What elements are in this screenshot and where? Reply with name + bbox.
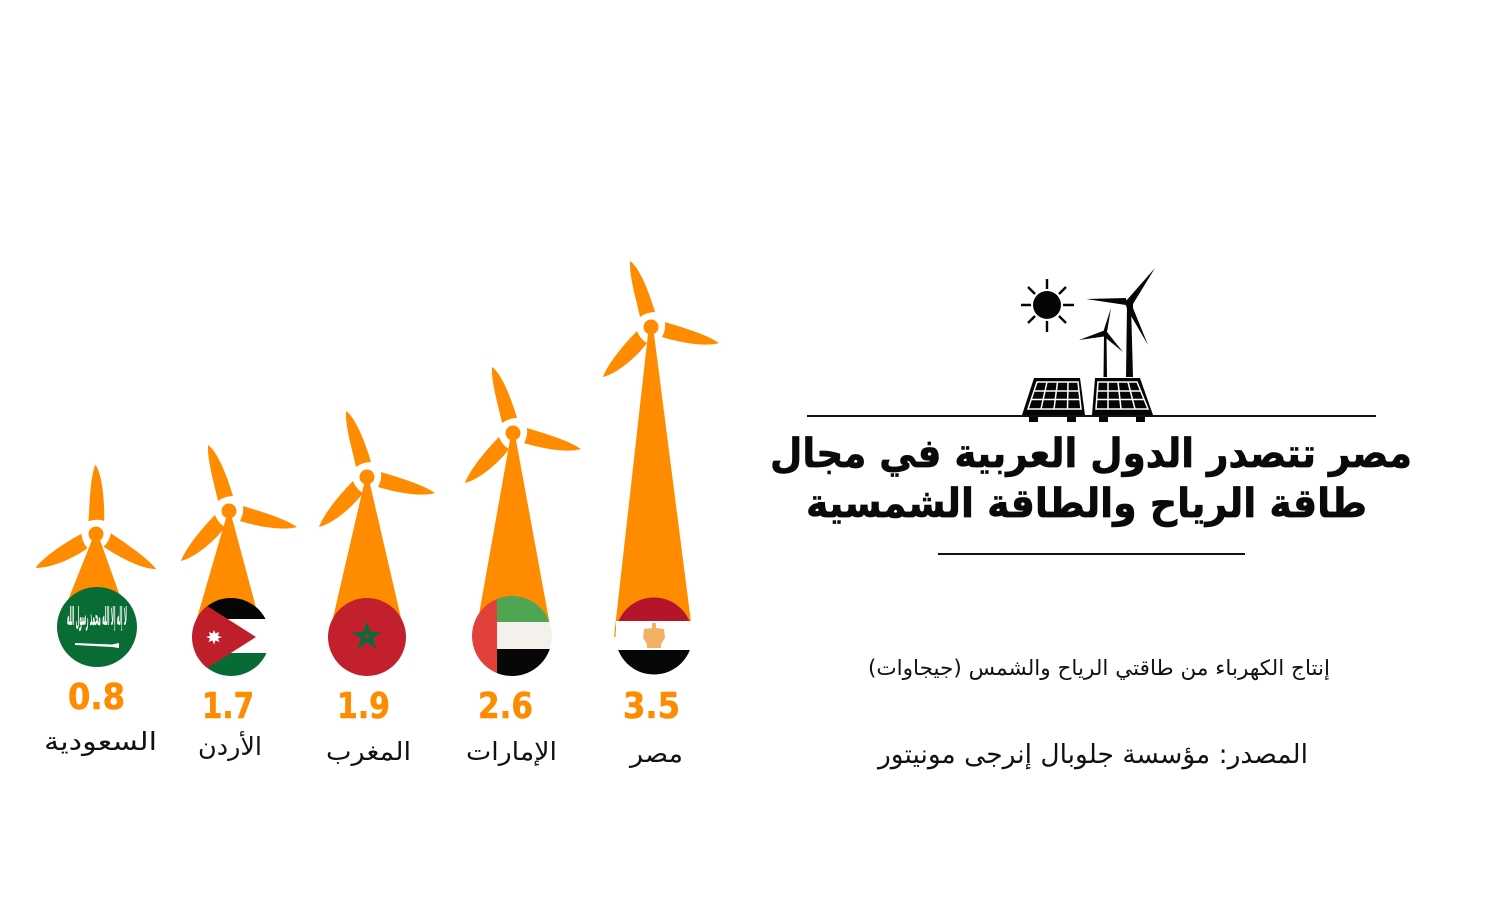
subtitle: chart description: إنتاج الكهرباء من طاقتي الرياح والشمس (جيجاوات) bbox=[868, 656, 1330, 681]
icon: left solar panel bbox=[1022, 378, 1085, 422]
value: Jordan: 1.7 bbox=[202, 686, 254, 727]
flag: UAE bbox=[472, 596, 553, 676]
chart: wind turbines by country bbox=[35, 261, 719, 768]
icon: sun bbox=[1021, 279, 1074, 332]
value: Egypt: 3.5 bbox=[623, 686, 680, 727]
icon: large turbine bbox=[1086, 268, 1155, 377]
flag: Egypt bbox=[614, 596, 694, 676]
icon: small turbine bbox=[1079, 308, 1123, 377]
turbine: UAE bbox=[465, 367, 581, 766]
turbine: Jordan bbox=[181, 445, 297, 761]
icon: right solar panel bbox=[1092, 378, 1153, 422]
icon: sun, wind turbines and solar panels bbox=[1021, 268, 1155, 422]
value: UAE: 2.6 bbox=[478, 686, 533, 727]
label: Morocco: المغرب bbox=[326, 737, 411, 766]
title bbox=[770, 431, 1412, 527]
label: Egypt: مصر bbox=[628, 739, 683, 768]
label: UAE: الإمارات bbox=[466, 737, 557, 766]
flag: Saudi Arabia bbox=[57, 587, 137, 667]
value: Morocco: 1.9 bbox=[337, 686, 390, 727]
label: Jordan: الأردن bbox=[198, 730, 262, 761]
turbine: Morocco bbox=[319, 411, 435, 766]
flag: Morocco bbox=[328, 598, 406, 676]
title: مصر تتصدر الدول العربية في مجال bbox=[770, 431, 1412, 477]
turbine: Egypt bbox=[603, 261, 719, 768]
turbine: Saudi Arabia bbox=[35, 457, 180, 756]
label: Saudi Arabia: السعودية bbox=[44, 727, 157, 756]
title: طاقة الرياح والطاقة الشمسية bbox=[806, 481, 1367, 527]
source note: المصدر: مؤسسة جلوبال إنرجى مونيتور bbox=[876, 740, 1308, 770]
value: Saudi Arabia: 0.8 bbox=[68, 677, 125, 718]
flag: Jordan bbox=[192, 598, 266, 676]
chart: wind turbines by country: لا إله إلا الله محمد رسول الله bbox=[67, 602, 127, 632]
